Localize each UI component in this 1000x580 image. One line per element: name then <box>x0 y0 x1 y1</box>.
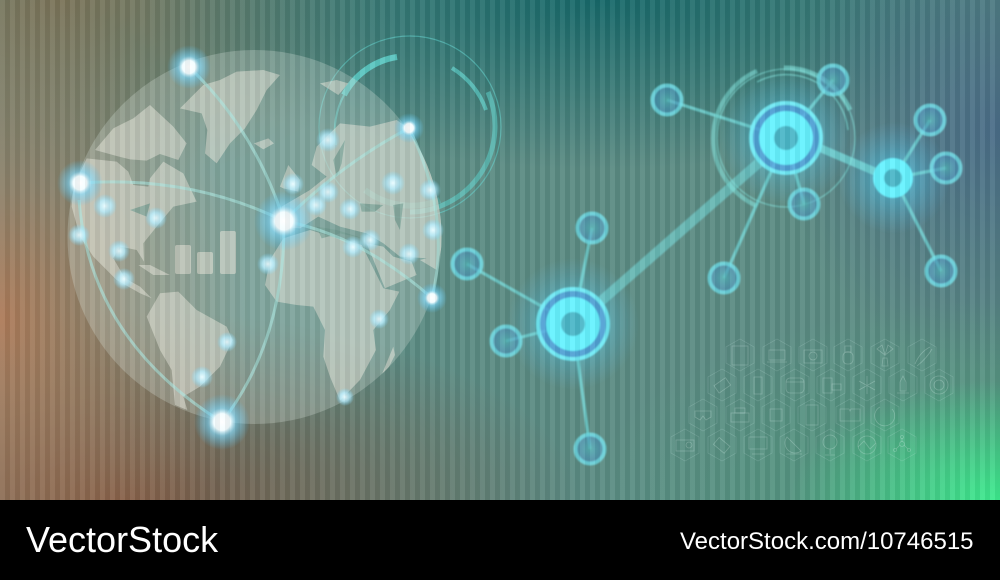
hub: lower left <box>538 289 608 359</box>
satellite nodes <box>452 66 960 464</box>
row 2 icons <box>708 369 953 401</box>
connection arcs <box>79 67 438 422</box>
hub: right <box>873 158 913 198</box>
hub: upper <box>751 103 821 173</box>
globe <box>57 45 447 450</box>
city glow points <box>68 128 444 406</box>
hub glows <box>507 72 950 390</box>
footer URL text: VectorStock.com/10746515 <box>680 528 974 555</box>
network glow points <box>57 45 447 450</box>
hexagon icon grid <box>671 339 953 461</box>
footer logo text: VectorStock <box>26 519 218 560</box>
continents <box>72 70 442 410</box>
footer bar <box>0 500 1000 580</box>
HUD rings around upper hub <box>713 68 855 207</box>
bar chart mark <box>175 231 236 274</box>
row 3 icons <box>689 399 899 431</box>
row 1 icons <box>726 339 936 371</box>
globe disc <box>68 50 442 424</box>
network diagram <box>452 66 960 464</box>
HUD rings behind globe <box>319 36 501 218</box>
water bodies <box>130 140 403 238</box>
connecting lines <box>467 80 946 449</box>
main artwork <box>58 35 964 466</box>
row 4 icons <box>671 429 916 461</box>
